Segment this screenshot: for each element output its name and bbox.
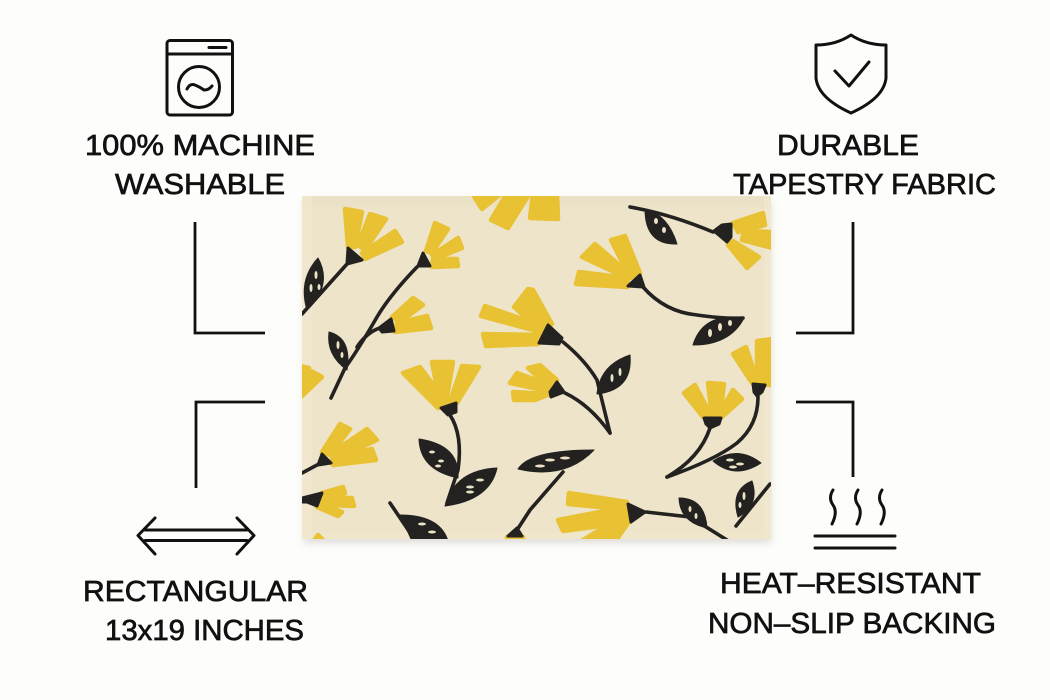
leaf spots (310, 218, 746, 534)
icon: washing machine (167, 40, 232, 115)
heading: rectangular size: RECTANGULAR (83, 576, 308, 608)
heading: rectangular size (83, 576, 308, 647)
placemat product (300, 193, 772, 543)
heading: rectangular size: 13x19 INCHES (105, 615, 304, 647)
connector: bottom left (196, 402, 265, 488)
connector: top left (195, 222, 265, 333)
icon: shield with check (816, 35, 886, 113)
black stems (302, 207, 770, 540)
icon: double arrow (138, 518, 254, 554)
yellow flower petals (300, 193, 772, 543)
heading: durable tapestry fabric: TAPESTRY FABRIC (733, 169, 996, 201)
connector: top right (796, 222, 853, 333)
icon: heat waves (815, 490, 895, 548)
heading: machine washable (85, 130, 315, 201)
heading: durable tapestry fabric: DURABLE (777, 130, 919, 162)
heading: machine washable: 100% MACHINE (85, 130, 315, 162)
heading: heat resistant backing: HEAT–RESISTANT (720, 568, 981, 600)
heading: heat resistant backing (708, 568, 996, 640)
heading: durable tapestry fabric (733, 130, 996, 201)
heading: machine washable: WASHABLE (115, 169, 285, 201)
heading: heat resistant backing: NON–SLIP BACKING (708, 608, 996, 640)
black calyxes and leaves (302, 209, 765, 541)
connector: bottom right (796, 402, 853, 477)
